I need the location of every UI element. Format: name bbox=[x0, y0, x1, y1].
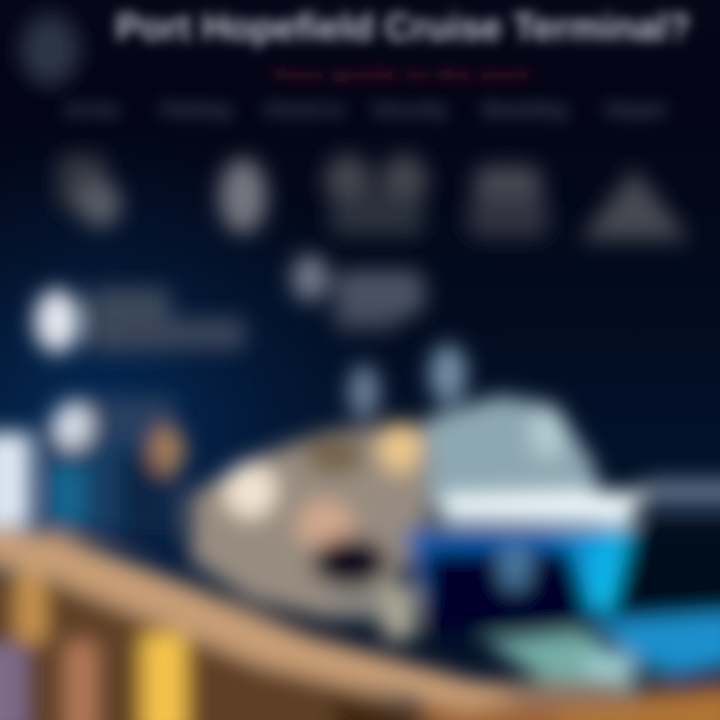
label 1: Arrive bbox=[65, 100, 119, 121]
ship superstructure bbox=[425, 395, 600, 505]
icon: luggage bbox=[468, 165, 548, 238]
wooden deck bbox=[0, 525, 720, 720]
label 2: Parking bbox=[161, 100, 231, 121]
handrail bbox=[0, 525, 520, 710]
label 4: Security bbox=[373, 100, 448, 121]
tower light bbox=[53, 402, 91, 448]
dark wedge bbox=[330, 695, 450, 720]
row of icons bbox=[58, 154, 690, 240]
photo: harbour scene bbox=[0, 344, 720, 720]
title: Port Hopefield Cruise Terminal? bbox=[116, 7, 690, 49]
callout text bbox=[90, 288, 245, 352]
tower warm light bbox=[151, 427, 185, 473]
icon: location pin bbox=[219, 158, 267, 234]
terminal highlights bbox=[224, 421, 421, 551]
subtitle: Your guide to the port bbox=[270, 65, 530, 84]
callout icon bbox=[34, 289, 80, 353]
icon: people bbox=[324, 154, 428, 236]
bottom right boards bbox=[420, 680, 720, 720]
left glare bbox=[0, 432, 32, 527]
logo badge bbox=[20, 14, 80, 86]
label 3: Check-in bbox=[264, 100, 344, 121]
left post glow bbox=[16, 558, 46, 642]
ship white stripe bbox=[440, 490, 645, 524]
callout text bbox=[335, 270, 425, 316]
deck shadow area bbox=[0, 570, 500, 720]
ship deck lights bbox=[530, 406, 566, 458]
left tower bbox=[45, 398, 175, 535]
row of category labels bbox=[65, 100, 667, 121]
water bbox=[480, 612, 720, 690]
callout marker bbox=[291, 254, 329, 302]
terminal building bbox=[190, 425, 430, 620]
ship funnels bbox=[348, 344, 467, 420]
yellow lit post bbox=[142, 634, 186, 720]
salmon post bbox=[66, 642, 96, 720]
gray quay bbox=[335, 585, 416, 640]
icon: mountain triangle bbox=[580, 168, 690, 240]
ship hull bbox=[405, 528, 632, 630]
dark shadow under terminal bbox=[312, 538, 388, 586]
icon: terminal bbox=[58, 155, 122, 228]
callout: left note bbox=[34, 288, 245, 353]
label 6: Depart bbox=[606, 100, 667, 121]
label 5: Boarding bbox=[483, 100, 567, 121]
callout: centre note bbox=[291, 254, 425, 330]
purple reflection bbox=[0, 645, 26, 720]
far right pier bbox=[600, 478, 720, 620]
